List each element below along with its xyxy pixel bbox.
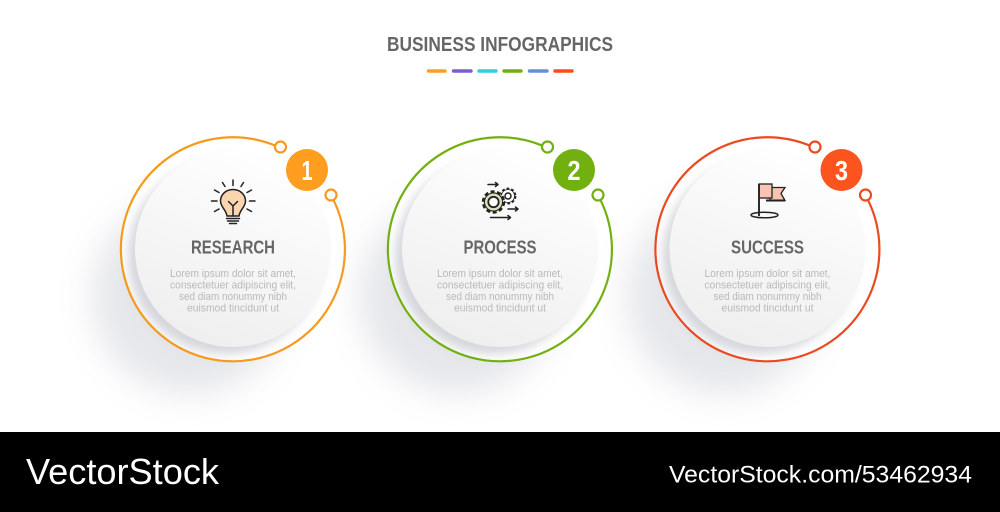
body text: research: consectetuer adipiscing elit, xyxy=(170,280,296,292)
colour dashes xyxy=(428,69,572,73)
number badge: success: 3 xyxy=(835,155,848,186)
soft shadow: process xyxy=(359,198,555,394)
panel: success xyxy=(626,137,879,394)
number badge: research xyxy=(286,149,328,191)
footer logo: VectorStock xyxy=(26,451,220,492)
icon: flag xyxy=(751,184,785,218)
inner disc shadow: success xyxy=(662,160,856,354)
body text: research: euismod tincidunt ut xyxy=(187,302,279,314)
body text: success: sed diam nonummy nibh xyxy=(714,291,822,303)
heading: process: PROCESS xyxy=(464,236,536,258)
panel: process xyxy=(359,137,612,394)
number badge: success xyxy=(820,149,862,191)
soft shadow: success xyxy=(626,198,822,394)
footer url: VectorStock.com/53462934 xyxy=(669,462,972,488)
body text: research: Lorem ipsum dolor sit amet, xyxy=(170,268,296,280)
body text: success: Lorem ipsum dolor sit amet, xyxy=(704,268,830,280)
inner disc shadow: process xyxy=(395,160,589,354)
ring end dots: research xyxy=(275,142,336,200)
heading: research: RESEARCH xyxy=(191,236,275,258)
soft shadow: research xyxy=(92,198,288,394)
body text: process: Lorem ipsum dolor sit amet, xyxy=(437,268,563,280)
body text: research: sed diam nonummy nibh xyxy=(179,291,287,303)
icon: gears and arrows xyxy=(483,182,518,220)
body text: success xyxy=(704,268,830,314)
body text: process: euismod tincidunt ut xyxy=(454,302,546,314)
panel: research xyxy=(92,137,345,394)
body text: process: sed diam nonummy nibh xyxy=(446,291,554,303)
icon: light bulb xyxy=(212,180,255,224)
number badge: process xyxy=(553,149,595,191)
footer bar xyxy=(0,432,1000,512)
body text: research xyxy=(170,268,296,314)
ring end dots: process xyxy=(542,142,604,200)
outline ring: process xyxy=(388,137,612,361)
body text: process: consectetuer adipiscing elit, xyxy=(437,280,563,292)
body text: process xyxy=(437,268,563,314)
title: BUSINESS INFOGRAPHICS xyxy=(387,34,613,56)
inner disc: research xyxy=(135,151,331,347)
heading: success: SUCCESS xyxy=(731,236,804,258)
outline ring: success xyxy=(655,137,879,361)
body text: success: euismod tincidunt ut xyxy=(722,302,814,314)
ring end dots: success xyxy=(810,142,871,200)
body text: success: consectetuer adipiscing elit, xyxy=(704,280,830,292)
inner disc: process xyxy=(402,151,598,347)
inner disc: success xyxy=(670,151,866,347)
number badge: process: 2 xyxy=(568,155,580,186)
inner disc shadow: research xyxy=(128,160,322,354)
number badge: research: 1 xyxy=(302,155,312,186)
outline ring: research xyxy=(121,137,345,361)
